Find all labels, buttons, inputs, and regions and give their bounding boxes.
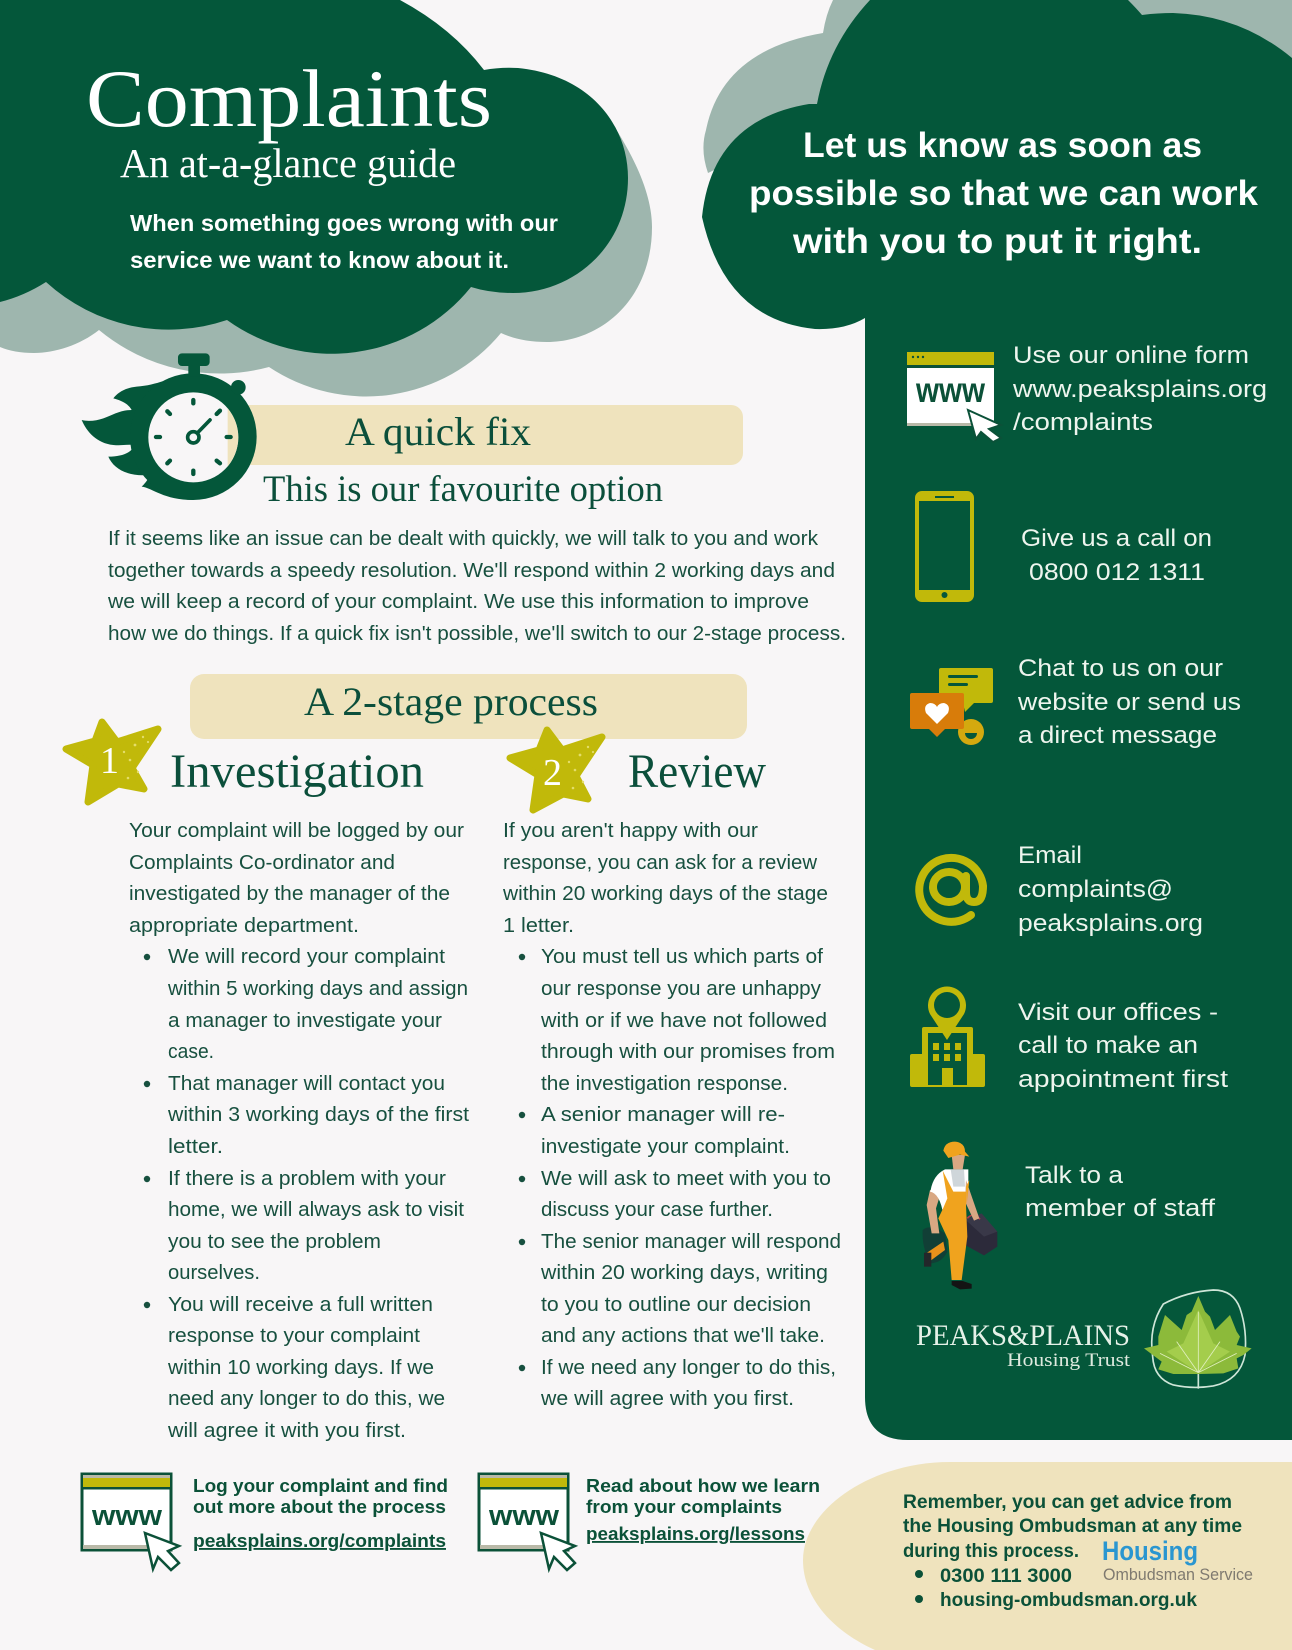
column: review: to you to outline our decision <box>541 1294 811 1316</box>
contact: staff: Talk to a <box>1025 1162 1123 1189</box>
header cloud: left <box>0 0 628 354</box>
quick fix paragraph: together towards a speedy resolution. We'll respond within 2 working days and <box>108 560 835 582</box>
column: review: 1 letter. <box>503 915 574 937</box>
logo wordmark <box>916 1319 1131 1371</box>
contact: phone: 0800 012 1311 <box>1029 559 1205 586</box>
quick fix paragraph: how we do things. If a quick fix isn't possible, we'll switch to our 2-stage process. <box>108 623 846 645</box>
contact: visit: appointment first <box>1018 1066 1228 1093</box>
icon: phone <box>917 493 972 600</box>
column: investigation: appropriate department. <box>129 915 359 937</box>
icon: www link 1 <box>82 1474 179 1570</box>
contact: email <box>1018 842 1203 937</box>
icon: www browser: www <box>915 371 986 410</box>
column: review: within 20 working days of the stage <box>502 883 828 905</box>
intro text <box>130 210 558 273</box>
column: investigation: case. <box>168 1041 214 1063</box>
icon: www link 1: www <box>91 1500 162 1532</box>
column: review: our response you are unhappy <box>541 978 821 1000</box>
column: review: through with our promises from <box>541 1041 835 1063</box>
ombudsman callout <box>803 1462 1292 1650</box>
column: review: We will ask to meet with you to <box>541 1168 831 1190</box>
title: Complaints <box>86 53 492 144</box>
contact: email: peaksplains.org <box>1018 910 1203 937</box>
ombudsman logo: Housing <box>1102 1536 1198 1566</box>
call to action: with you to put it right. <box>792 222 1202 261</box>
column: review <box>502 820 841 1410</box>
contact: phone <box>1021 525 1212 586</box>
column: investigation: a manager to investigate your <box>168 1010 442 1032</box>
star 1: 1 <box>100 740 119 782</box>
column: investigation: ourselves. <box>168 1262 260 1284</box>
contact: chat <box>1017 655 1241 749</box>
contact: chat: Chat to us on our <box>1018 655 1223 682</box>
icon: tradesperson <box>923 1142 997 1289</box>
column: review: A senior manager will re- <box>541 1104 785 1126</box>
icon: chat bubbles <box>910 668 993 745</box>
call to action: Let us know as soon as <box>803 126 1202 165</box>
contact panel <box>702 0 1292 1440</box>
intro text: service we want to know about it. <box>130 247 509 273</box>
contact: visit: Visit our offices - <box>1018 999 1218 1026</box>
contact: online form: Use our online form <box>1013 342 1249 369</box>
icon: office location <box>910 987 985 1087</box>
column: investigation: Your complaint will be logged by our <box>129 820 464 842</box>
icon: www browser <box>907 352 1001 442</box>
heading: review: Review <box>628 745 766 798</box>
intro text: When something goes wrong with our <box>130 210 558 236</box>
link text 2: from your complaints <box>586 1496 782 1517</box>
column: review: The senior manager will respond <box>541 1231 841 1253</box>
column: investigation: you to see the problem <box>168 1231 381 1253</box>
column: review: within 20 working days, writing <box>540 1262 828 1284</box>
contact: online form: www.peaksplains.org <box>1012 376 1267 403</box>
column: review: investigate your complaint. <box>541 1136 790 1158</box>
column: review: with or if we have not followed <box>540 1010 827 1032</box>
subtitle: An at-a-glance guide <box>120 140 456 186</box>
contact: email: Email <box>1018 842 1082 869</box>
column: investigation: within 3 working days of the first <box>167 1104 469 1126</box>
header cloud: shadow left <box>0 120 652 396</box>
call to action: possible so that we can work <box>749 174 1259 213</box>
column: investigation: You will receive a full written <box>168 1294 433 1316</box>
ombudsman callout: during this process. <box>903 1540 1079 1562</box>
ombudsman logo <box>1102 1536 1253 1584</box>
column: review: the investigation response. <box>541 1073 788 1095</box>
logo wordmark: Housing Trust <box>1007 1350 1131 1371</box>
column: investigation: within 10 working days. If we <box>167 1357 434 1379</box>
column: investigation: will agree it with you first. <box>167 1420 406 1442</box>
icon: at sign <box>919 858 983 922</box>
quick fix paragraph <box>107 528 846 645</box>
icon: www link 2: www <box>488 1500 559 1532</box>
contact: email: complaints@ <box>1018 876 1173 903</box>
contact: online form <box>1012 342 1267 436</box>
star 1 <box>66 722 158 802</box>
link text 2: peaksplains.org/lessons <box>586 1523 805 1544</box>
quick fix subheading: This is our favourite option <box>263 469 663 510</box>
quick fix banner: A quick fix <box>345 409 531 454</box>
column: investigation: letter. <box>168 1136 223 1158</box>
column: review: and any actions that we'll take. <box>541 1325 825 1347</box>
column: investigation: We will record your complaint <box>168 946 445 968</box>
contact: chat: website or send us <box>1017 689 1241 716</box>
column: investigation: need any longer to do this, we <box>168 1388 445 1410</box>
heading: investigation: Investigation <box>170 745 424 798</box>
column: investigation: investigated by the manager of the <box>129 883 450 905</box>
column: investigation: If there is a problem with your <box>168 1168 446 1190</box>
contact: phone: Give us a call on <box>1021 525 1212 552</box>
logo wordmark: PEAKS&PLAINS <box>916 1319 1130 1352</box>
quick fix paragraph: we will keep a record of your complaint. We use this information to improve <box>107 591 809 613</box>
star 2: 2 <box>543 752 562 794</box>
column: review: we will agree with you first. <box>540 1388 794 1410</box>
star 2 <box>510 730 602 810</box>
icon: www link 2 <box>479 1474 575 1570</box>
column: review: If we need any longer to do this, <box>541 1357 836 1379</box>
2-stage banner: A 2-stage process <box>304 679 598 724</box>
column: investigation: home, we will always ask to visit <box>168 1199 464 1221</box>
column: review: If you aren't happy with our <box>503 820 758 842</box>
column: investigation: Complaints Co-ordinator and <box>129 852 395 874</box>
header cloud: shadow right <box>703 0 1292 173</box>
call to action <box>749 126 1259 261</box>
link text 1 <box>193 1475 448 1551</box>
ombudsman callout: Remember, you can get advice from <box>903 1491 1232 1513</box>
column: investigation: within 5 working days and assign <box>167 978 468 1000</box>
contact: chat: a direct message <box>1018 722 1217 749</box>
column: review: You must tell us which parts of <box>541 946 823 968</box>
link text 1: out more about the process <box>193 1496 446 1517</box>
contact: staff: member of staff <box>1025 1195 1215 1222</box>
link text 1: peaksplains.org/complaints <box>193 1530 446 1551</box>
ombudsman callout: housing-ombudsman.org.uk <box>940 1589 1197 1611</box>
ombudsman logo: Ombudsman Service <box>1103 1565 1253 1584</box>
icon: stopwatch <box>82 353 257 500</box>
column: review: response, you can ask for a review <box>503 852 818 874</box>
quick fix banner <box>227 405 743 465</box>
link text 2: Read about how we learn <box>586 1475 820 1496</box>
link text 2 <box>586 1475 820 1544</box>
column: investigation: response to your complaint <box>168 1325 420 1347</box>
contact: staff <box>1025 1162 1215 1222</box>
link text 1: Log your complaint and find <box>193 1475 448 1496</box>
column: investigation <box>129 820 469 1442</box>
contact: visit: call to make an <box>1018 1032 1198 1059</box>
quick fix paragraph: If it seems like an issue can be dealt with quickly, we will talk to you and work <box>108 528 819 550</box>
logo leaf <box>1144 1290 1252 1389</box>
2-stage banner <box>190 674 747 739</box>
contact: visit <box>1018 999 1228 1093</box>
column: investigation: That manager will contact you <box>168 1073 445 1095</box>
ombudsman callout: 0300 111 3000 <box>940 1565 1072 1587</box>
column: review: discuss your case further. <box>541 1199 773 1221</box>
ombudsman callout: the Housing Ombudsman at any time <box>903 1515 1242 1537</box>
contact: online form: /complaints <box>1013 409 1153 436</box>
